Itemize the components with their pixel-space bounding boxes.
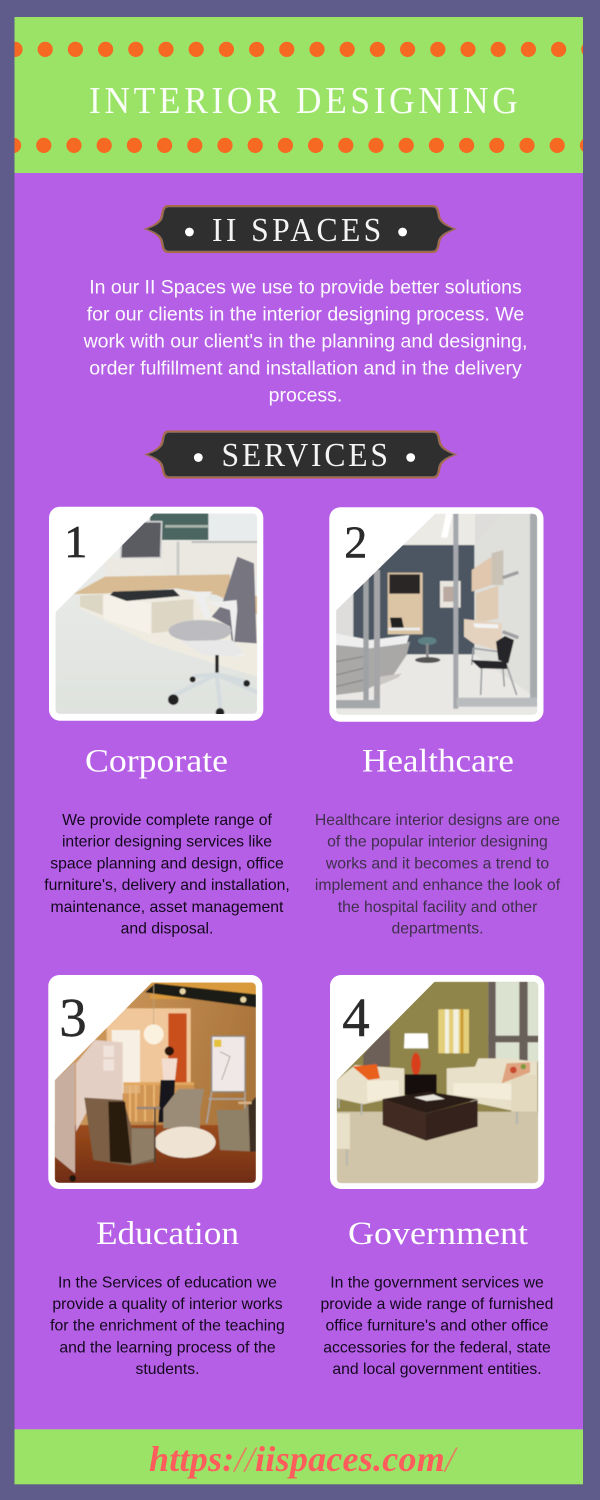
number ribbon 4 [335, 980, 437, 1082]
text: corporate description: We provide complete range of [62, 812, 273, 829]
card 2: healthcare image: 2 [344, 516, 367, 568]
text: corporate description [44, 812, 290, 938]
bottom dotted row [6, 138, 595, 153]
card 1: corporate image [49, 507, 263, 721]
heading plaque: II SPACES [144, 205, 457, 253]
footer url: https://iispaces.com/ [149, 1439, 458, 1479]
text: healthcare description: works and it becomes a trend to [325, 855, 549, 872]
text: government description: In the government services we [330, 1274, 544, 1291]
text: healthcare description: the hospital facility and other [338, 899, 537, 916]
intro paragraph: order fulfillment and installation and in the delivery [89, 358, 522, 380]
heading: Healthcare: Healthcare [362, 744, 514, 780]
top dotted row [7, 42, 596, 57]
heading: Corporate: Corporate [85, 744, 228, 780]
text: healthcare description: implement and enhance the look of [315, 877, 561, 894]
text: education description: students. [136, 1361, 199, 1378]
intro paragraph: work with our client's in the planning and designing, [83, 330, 527, 352]
heading plaque: SERVICES [144, 430, 458, 478]
panel: main purple body [14, 173, 583, 1430]
heading: Education: Education [96, 1216, 239, 1252]
heading plaque: SERVICES: SERVICES [222, 437, 388, 474]
card 2: healthcare image [329, 507, 544, 722]
text: education description: provide a quality of interior works [52, 1296, 283, 1313]
text: healthcare description: Healthcare interior designs are one [315, 812, 560, 829]
text: education description: In the Services of education we [58, 1274, 277, 1291]
header banner [6, 17, 596, 173]
text: corporate description: maintenance, asset management [51, 899, 284, 916]
text: government description: accessories for the federal, state [323, 1339, 551, 1356]
text: corporate description: furniture's, delivery and installation, [44, 877, 290, 894]
text: government description [321, 1274, 553, 1378]
card 3: education image [48, 975, 262, 1189]
intro paragraph: for our clients in the interior designing process. We [87, 304, 524, 326]
text: corporate description: interior designing services like [62, 834, 272, 851]
heading: Government: Government [348, 1216, 528, 1252]
text: education description: and the learning process of the [59, 1339, 276, 1356]
intro paragraph [83, 276, 527, 406]
intro paragraph: process. [269, 384, 342, 406]
number ribbon 3 [53, 980, 154, 1082]
title: INTERIOR DESIGNING [89, 79, 518, 121]
text: education description [50, 1274, 285, 1378]
number ribbon 2 [334, 512, 437, 612]
text: healthcare description: of the popular interior designing [327, 834, 548, 851]
text: education description: for the enrichment of the teaching [50, 1318, 285, 1335]
number ribbon 1 [53, 512, 155, 614]
card 4: government image: 4 [342, 987, 370, 1048]
text: corporate description: space planning and design, office [50, 855, 284, 872]
text: healthcare description: departments. [392, 920, 483, 938]
text: government description: provide a wide range of furnished [321, 1296, 553, 1313]
text: healthcare description [315, 812, 561, 938]
footer banner [14, 1429, 583, 1484]
intro paragraph: In our II Spaces we use to provide better solutions [89, 276, 522, 298]
card 1: corporate image: 1 [64, 516, 87, 567]
text: corporate description: and disposal. [121, 920, 213, 938]
card 3: education image: 3 [59, 987, 87, 1048]
heading plaque: II SPACES: II SPACES [212, 212, 381, 249]
text: government description: and local government entities. [332, 1361, 542, 1378]
card 4: government image [330, 975, 544, 1189]
text: government description: office furniture's and other office [325, 1318, 549, 1335]
